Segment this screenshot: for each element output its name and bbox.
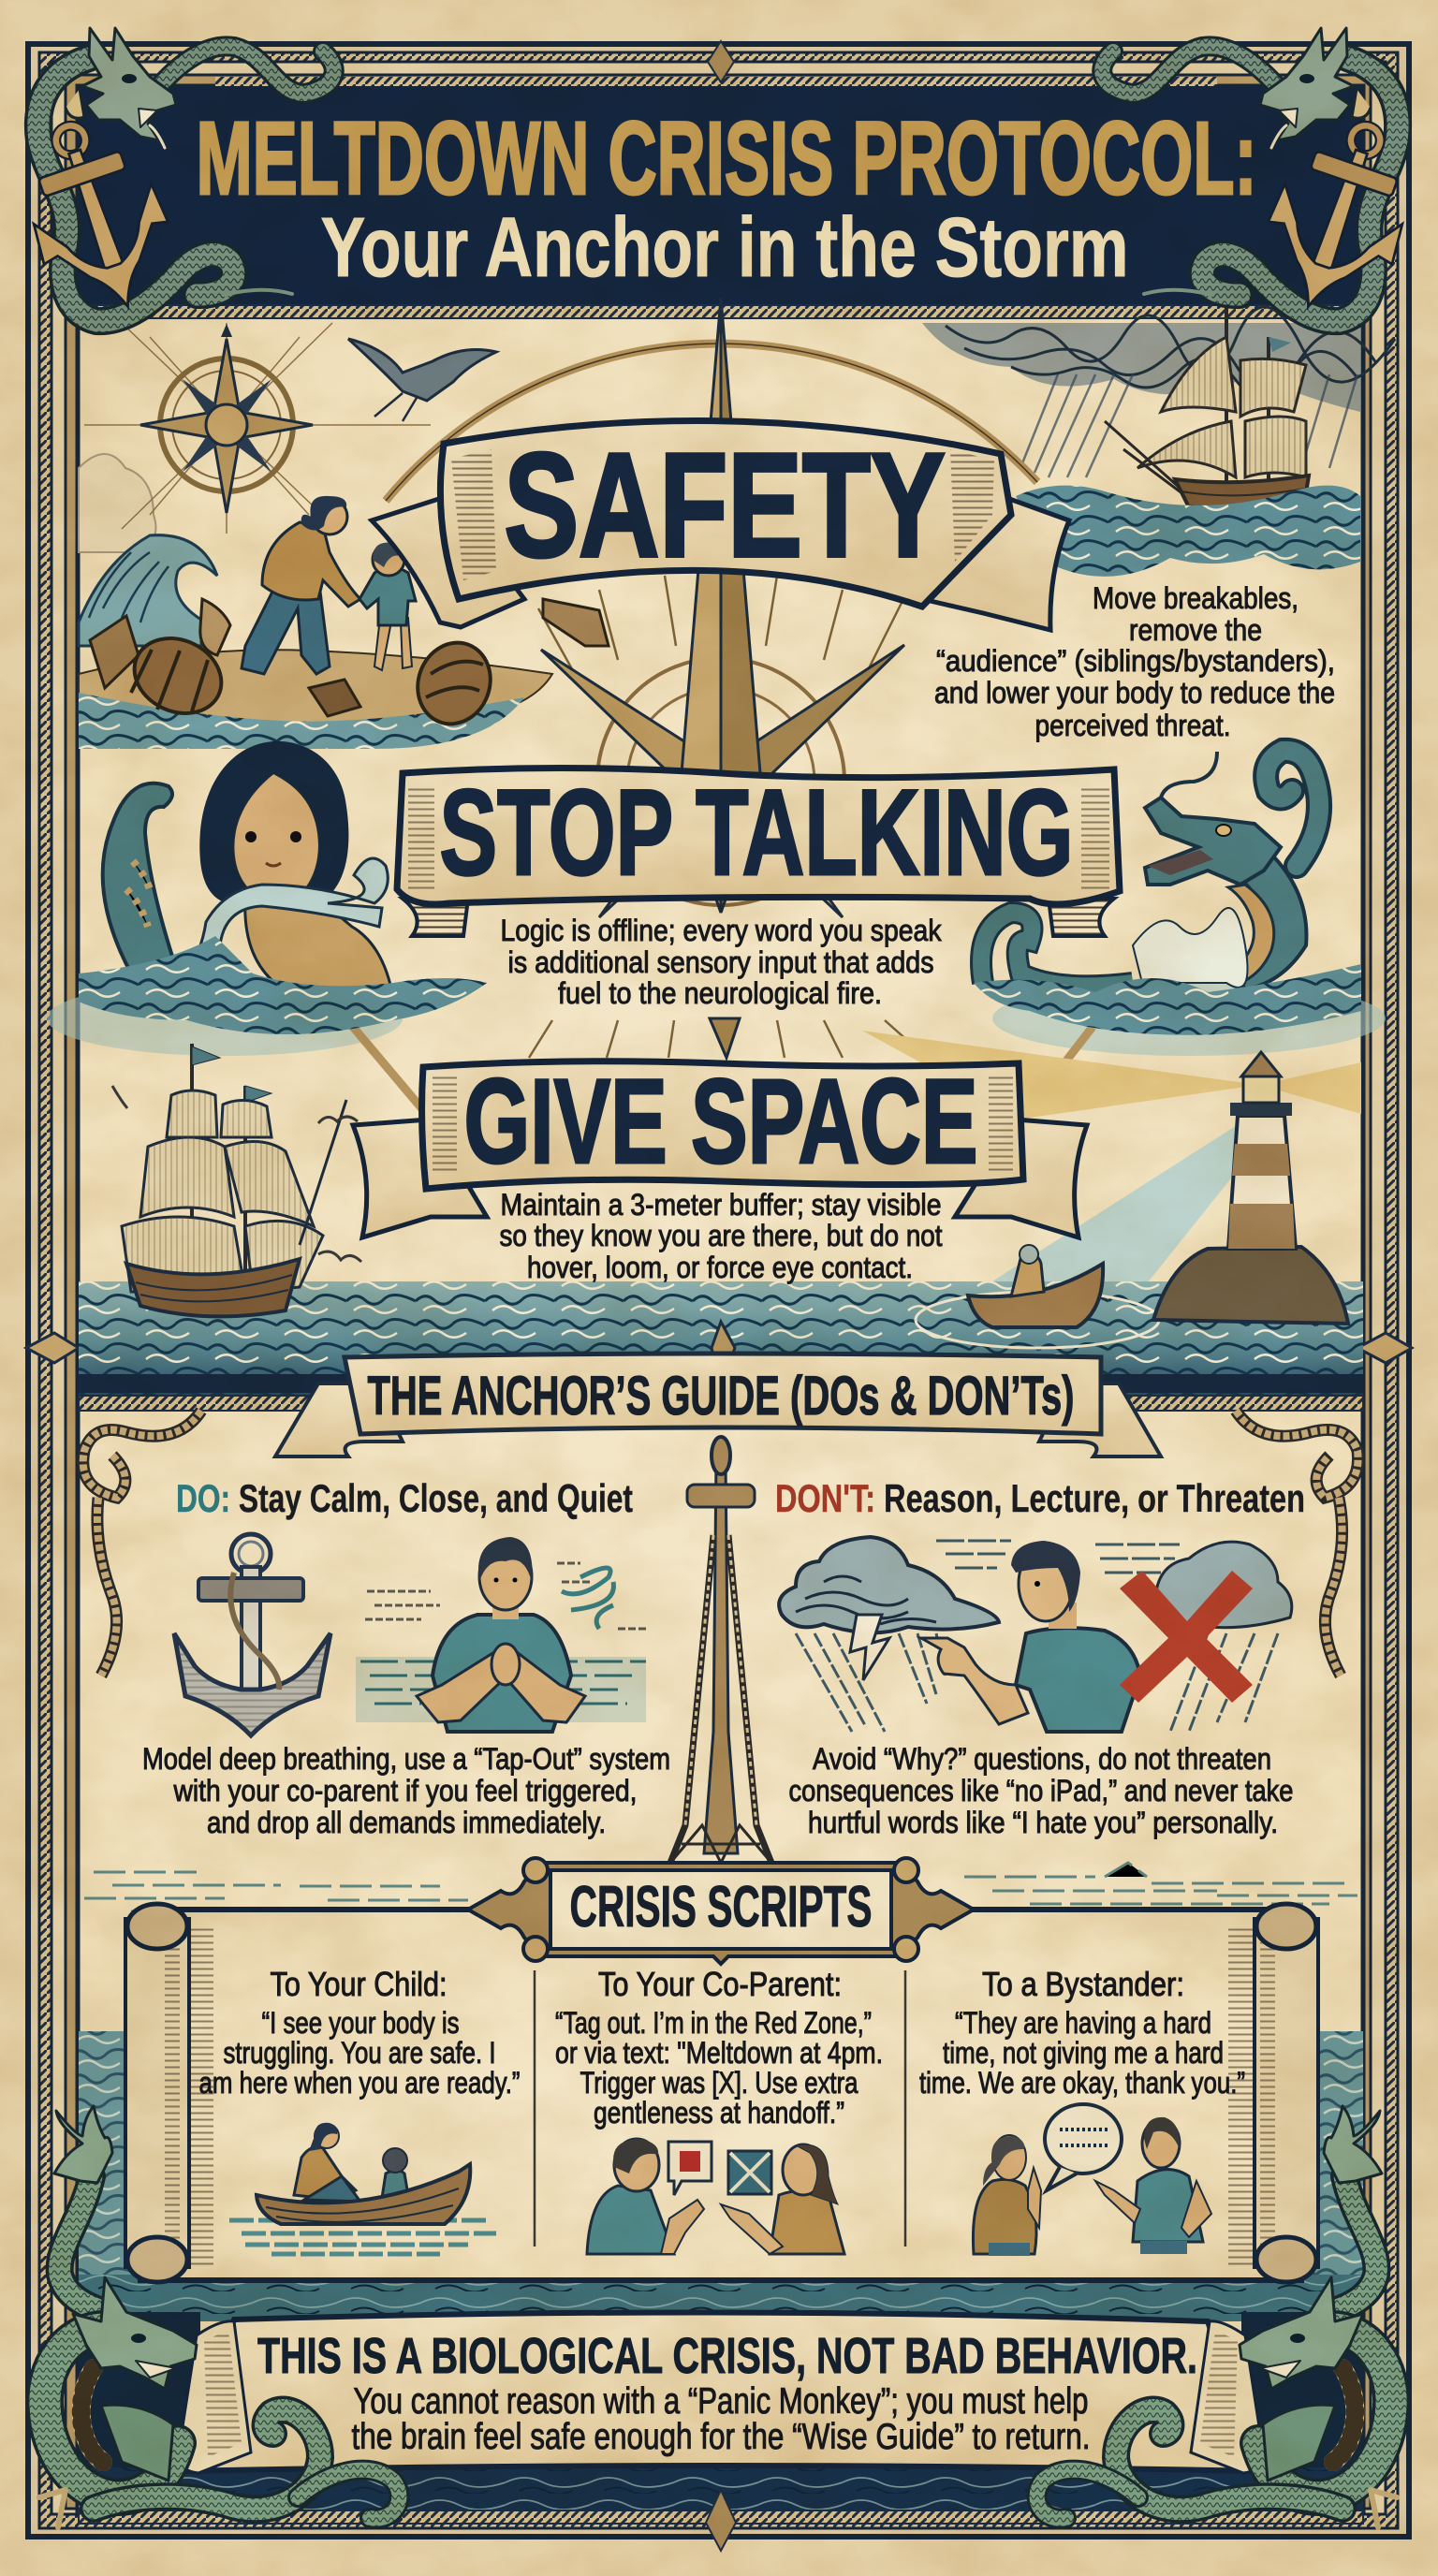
illustration: sea dragon and tentacle [974,751,1361,1035]
illustration: co-parents talking [587,2139,844,2254]
lower sea and dragons [79,2031,1363,2551]
column: to your co-parent: “Tag out. I’m in the Red Zone,” [555,2006,872,2040]
column: to your co-parent: gentleness at handoff.” [594,2096,844,2130]
plaque: crisis scripts [468,1858,974,1964]
text block: don't details: Avoid “Why?” questions, do not threaten [813,1742,1271,1776]
text block: do details: with your co-parent if you feel triggered, [173,1774,637,1808]
mast [670,1437,771,1863]
text block: do details [142,1742,670,1839]
column: to your child: “I see your body is [262,2006,459,2040]
lower section waves and ropes [79,1374,1363,1911]
banner: give space [353,1055,1087,1237]
scene backdrop: storm sky and teal wash [47,307,1395,1056]
text block: closing message: You cannot reason with a “Panic Monkey”; you must help [354,2381,1088,2422]
corner dragon and anchor top-left [4,28,334,328]
heading: anchor's guide: THE ANCHOR’S GUIDE (DOs & DON’Ts) [367,1366,1075,1427]
text block: safety details: and lower your body to reduce the [934,676,1335,710]
icon: small compass [84,323,431,534]
heading: stop talking: STOP TALKING [440,764,1073,900]
column: to a bystander: To a Bystander: [982,1965,1184,2003]
text block: closing message: the brain feel safe enough for the “Wise Guide” to return. [352,2417,1090,2457]
illustration: sailing ship [112,1044,361,1316]
banner: safety [372,420,1069,630]
illustration: small rowboat [968,1245,1103,1327]
icon: red X [1120,1571,1253,1703]
text block: closing message [352,2381,1090,2457]
column: to your child [198,1965,521,2100]
icon: anchor [174,1534,330,1735]
text block: give space details: so they know you are there, but do not [500,1219,943,1252]
banner: the anchor's guide [275,1354,1161,1456]
lighthouse beams [862,1031,1361,1329]
title band [78,87,1363,318]
heading: give space: GIVE SPACE [464,1055,977,1189]
panel: crisis scripts scroll [125,1904,1318,2282]
illustration: parent and child in boat [229,2123,496,2254]
heading: don't: DON'T: Reason, Lecture, or Threaten [775,1476,1305,1520]
lower corner dragons [39,2106,1397,2527]
banner: stop talking [397,764,1120,936]
illustration: mother and child [242,496,416,674]
column: to your co-parent: To Your Co-Parent: [598,1965,842,2003]
column: to your child: struggling. You are safe. I [223,2036,496,2070]
illustration: ship in storm [1105,304,1309,527]
text block: give space details [500,1188,943,1284]
scroll roll right [1255,1904,1318,2282]
text block: stop talking details [500,914,942,1010]
corner dragon and anchor top-right [1102,28,1432,328]
subtitle: Your Anchor in the Storm [320,201,1129,295]
text block: safety details: “audience” (siblings/bystanders), [936,644,1335,678]
illustration: person scolding under storm [779,1537,1292,1732]
text block: don't details [788,1742,1294,1839]
column: to a bystander: time, not giving me a hard [943,2036,1224,2070]
illustration: bystander conversation [973,2104,1211,2256]
column: to your child: am here when you are ready.” [198,2066,521,2100]
text block: stop talking details: is additional sensory input that adds [507,945,934,979]
text block: safety details: Move breakables, [1093,581,1299,615]
text block: safety details: perceived threat. [1035,709,1230,742]
column: to your co-parent: Trigger was [X]. Use extra [580,2066,858,2100]
text block: stop talking details: fuel to the neurological fire. [558,976,882,1010]
text block: safety details: remove the [1129,613,1262,647]
illustration: lighthouse on rock [1153,1052,1348,1324]
text block: don't details: hurtful words like “I hate you” personally. [808,1806,1278,1839]
panel: closing scroll [178,2312,1264,2473]
text block: give space details: Maintain a 3-meter buffer; stay visible [500,1188,942,1222]
illustration: woman overwhelmed by wave [79,741,487,1034]
heading: crisis scripts: CRISIS SCRIPTS [569,1875,873,1939]
illustration: wave, debris and island [79,535,609,749]
text block: don't details: consequences like “no iPad,” and never take [788,1774,1294,1808]
text block: safety details [934,581,1335,742]
text block: do details: Model deep breathing, use a “Tap-Out” system [142,1742,670,1776]
heading: do: DO: Stay Calm, Close, and Quiet [176,1476,633,1520]
text block: stop talking details: Logic is offline; every word you speak [500,914,942,947]
heading: safety: SAFETY [504,423,946,588]
sea band [79,1281,1363,1409]
column: to your co-parent [555,1965,883,2130]
icon: seabird [348,339,496,421]
text block: give space details: hover, loom, or force eye contact. [527,1251,913,1284]
column: to a bystander [919,1965,1245,2100]
illustration: stormy sea [1016,486,1360,577]
illustration: calm person breathing [356,1537,646,1732]
column: to a bystander: “They are having a hard [955,2006,1211,2040]
column: to your co-parent: or via text: "Meltdown at 4pm. [555,2036,883,2070]
big compass rose [353,298,1093,1110]
column: to your child: To Your Child: [270,1965,448,2003]
text block: do details: and drop all demands immediately. [207,1806,606,1839]
column: to a bystander: time. We are okay, thank you.” [919,2066,1245,2100]
scroll roll left [125,1904,189,2282]
